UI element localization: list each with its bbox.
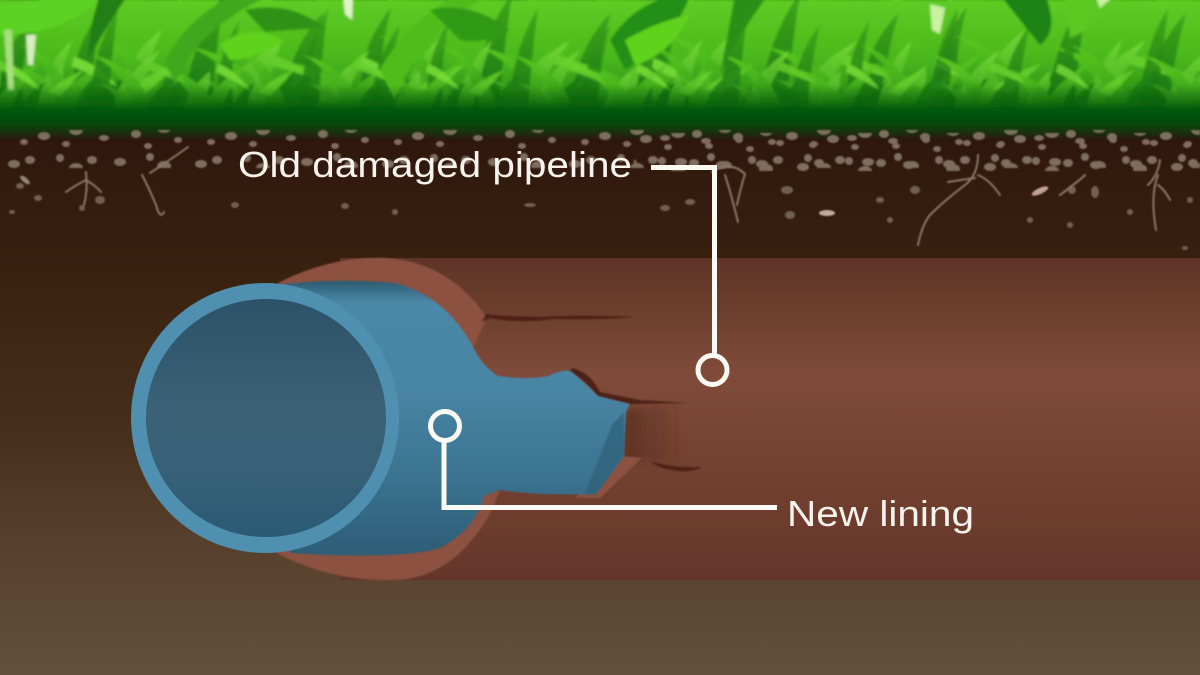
old damaged pipe	[275, 258, 1200, 580]
lower pipe end rim	[275, 490, 500, 580]
lower torn strip	[575, 456, 642, 498]
callout marker	[430, 412, 460, 440]
cracks	[482, 314, 702, 471]
lining body	[285, 281, 630, 556]
callout line	[651, 168, 714, 356]
label text: Old damaged pipeline	[238, 144, 632, 185]
label: old damaged pipeline	[238, 144, 727, 384]
broken wall shading	[620, 408, 685, 462]
new lining	[131, 281, 630, 556]
label text: New lining	[787, 493, 974, 534]
soil specks	[0, 130, 1200, 250]
roots	[66, 147, 1170, 245]
pipe end rim	[278, 258, 487, 350]
lining shading	[585, 412, 624, 494]
pipe body	[340, 258, 1200, 580]
callout marker	[698, 356, 727, 384]
inner opening	[146, 299, 386, 537]
outer ring	[131, 283, 399, 553]
callout line	[444, 440, 777, 508]
label: new lining	[430, 412, 974, 534]
grass	[0, 0, 1200, 140]
